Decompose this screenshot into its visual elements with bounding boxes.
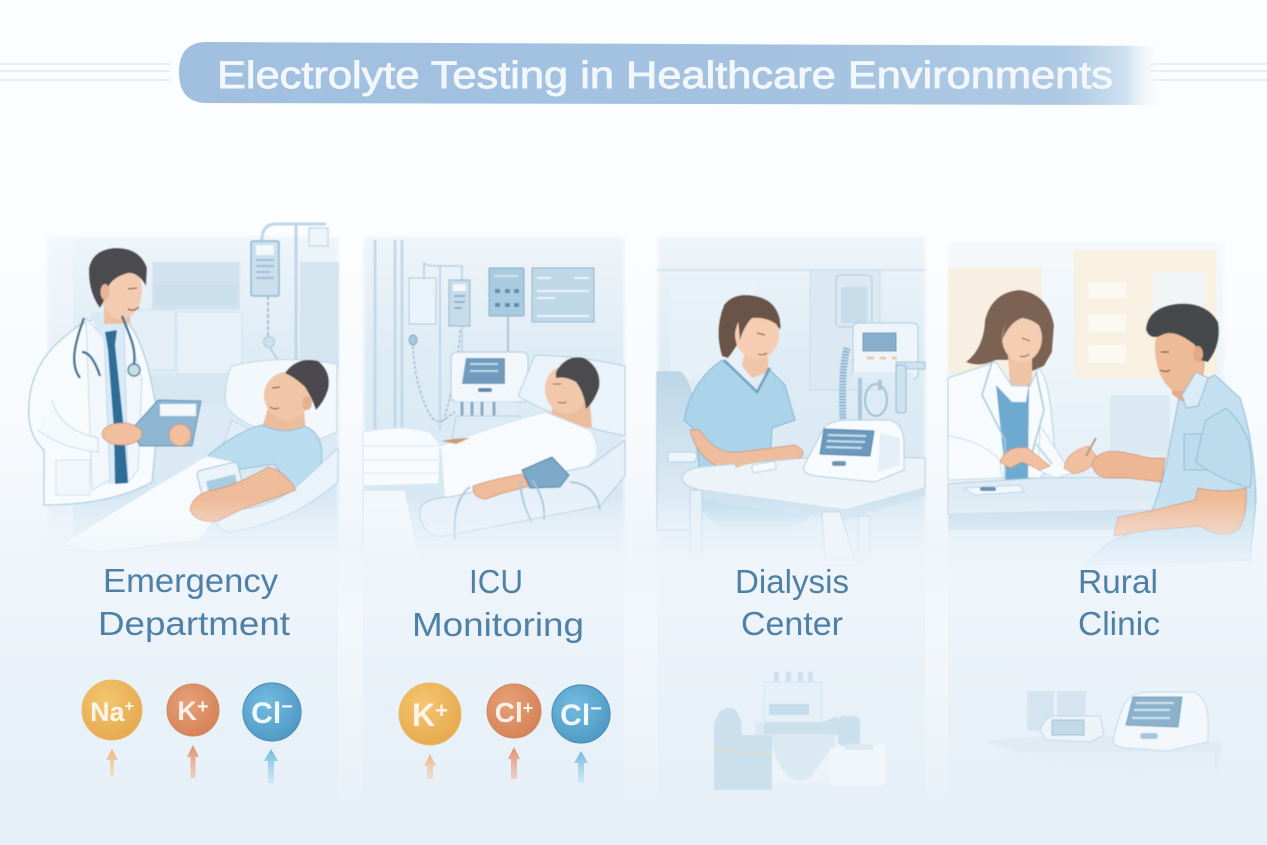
stethoscope: [74, 316, 134, 378]
panel: ICU scene: [363, 237, 625, 567]
ion: potassium: +: [197, 696, 209, 718]
label: Dialysis Center: [735, 563, 849, 642]
ion: chloride: [243, 683, 301, 741]
ion: chloride: −: [281, 696, 293, 718]
nurse: [684, 295, 820, 530]
label: ICU Monitoring: [412, 563, 584, 643]
table: [681, 456, 926, 548]
label: ICU Monitoring: Monitoring: [412, 606, 584, 643]
clinician: [948, 290, 1098, 480]
doctor: [29, 248, 201, 505]
wall screens: [489, 268, 594, 354]
ion: chlorine positive: [487, 684, 541, 738]
patient: [1085, 304, 1256, 565]
ion: sodium: Na: [90, 697, 125, 727]
patient: [60, 360, 338, 552]
pillow: [518, 355, 625, 436]
analyzer: [804, 420, 904, 482]
bedside monitor: [450, 352, 528, 450]
arrow: chloride up: [574, 751, 588, 783]
ion: potassium: K: [177, 696, 197, 726]
panel: emergency department scene: [29, 224, 339, 567]
ion: potassium: +: [435, 698, 448, 723]
wall posters: [948, 250, 1216, 455]
ion: chloride: [552, 685, 610, 743]
label: Rural Clinic: Rural: [1078, 563, 1158, 600]
arrow: chlorine up: [508, 747, 520, 779]
ion: potassium: K: [412, 697, 435, 733]
iv bags: [409, 262, 470, 430]
ion: chlorine positive: Cl: [495, 697, 523, 728]
label: Emergency Department: Emergency: [103, 562, 279, 599]
chair: [657, 372, 700, 530]
ion: potassium: [167, 684, 219, 736]
desk: [947, 476, 1152, 530]
ion: sodium: +: [125, 698, 134, 715]
label: Rural Clinic: Clinic: [1078, 605, 1160, 642]
ion: chlorine positive: +: [523, 698, 533, 718]
arrow: potassium up: [187, 745, 199, 778]
title text: Electrolyte Testing in Healthcare Environments: [217, 55, 1113, 97]
arrow: sodium up: [106, 749, 118, 777]
ion: chloride: Cl: [560, 699, 590, 732]
equipment: dialysis machines: [714, 672, 885, 790]
ion: potassium: [399, 683, 461, 745]
ion: sodium: [82, 680, 142, 740]
label: ICU Monitoring: ICU: [469, 563, 523, 600]
equipment: clinic analyzers: [986, 691, 1222, 787]
label: Dialysis Center: Center: [741, 605, 843, 642]
ion group: emergency department: [82, 680, 301, 783]
arrow: chloride up: [264, 749, 278, 783]
patient: [363, 357, 625, 560]
label: Rural Clinic: [1078, 563, 1160, 642]
label: Dialysis Center: Dialysis: [735, 563, 849, 600]
title banner: [0, 42, 1267, 105]
ion: chloride: Cl: [251, 697, 281, 730]
iv pole and bag: [251, 224, 328, 362]
ion group: ICU monitoring: [399, 683, 610, 783]
label: Emergency Department: [98, 562, 290, 642]
ion: chloride: −: [590, 698, 602, 720]
arrow: potassium up: [424, 754, 436, 779]
panel: dialysis center scene: [657, 237, 925, 567]
label: Emergency Department: Department: [98, 605, 290, 642]
back dialysis machine: [836, 275, 925, 420]
panel: rural clinic scene: [948, 242, 1256, 567]
patient bed pillow: [226, 359, 337, 440]
clipboard: [131, 400, 201, 446]
